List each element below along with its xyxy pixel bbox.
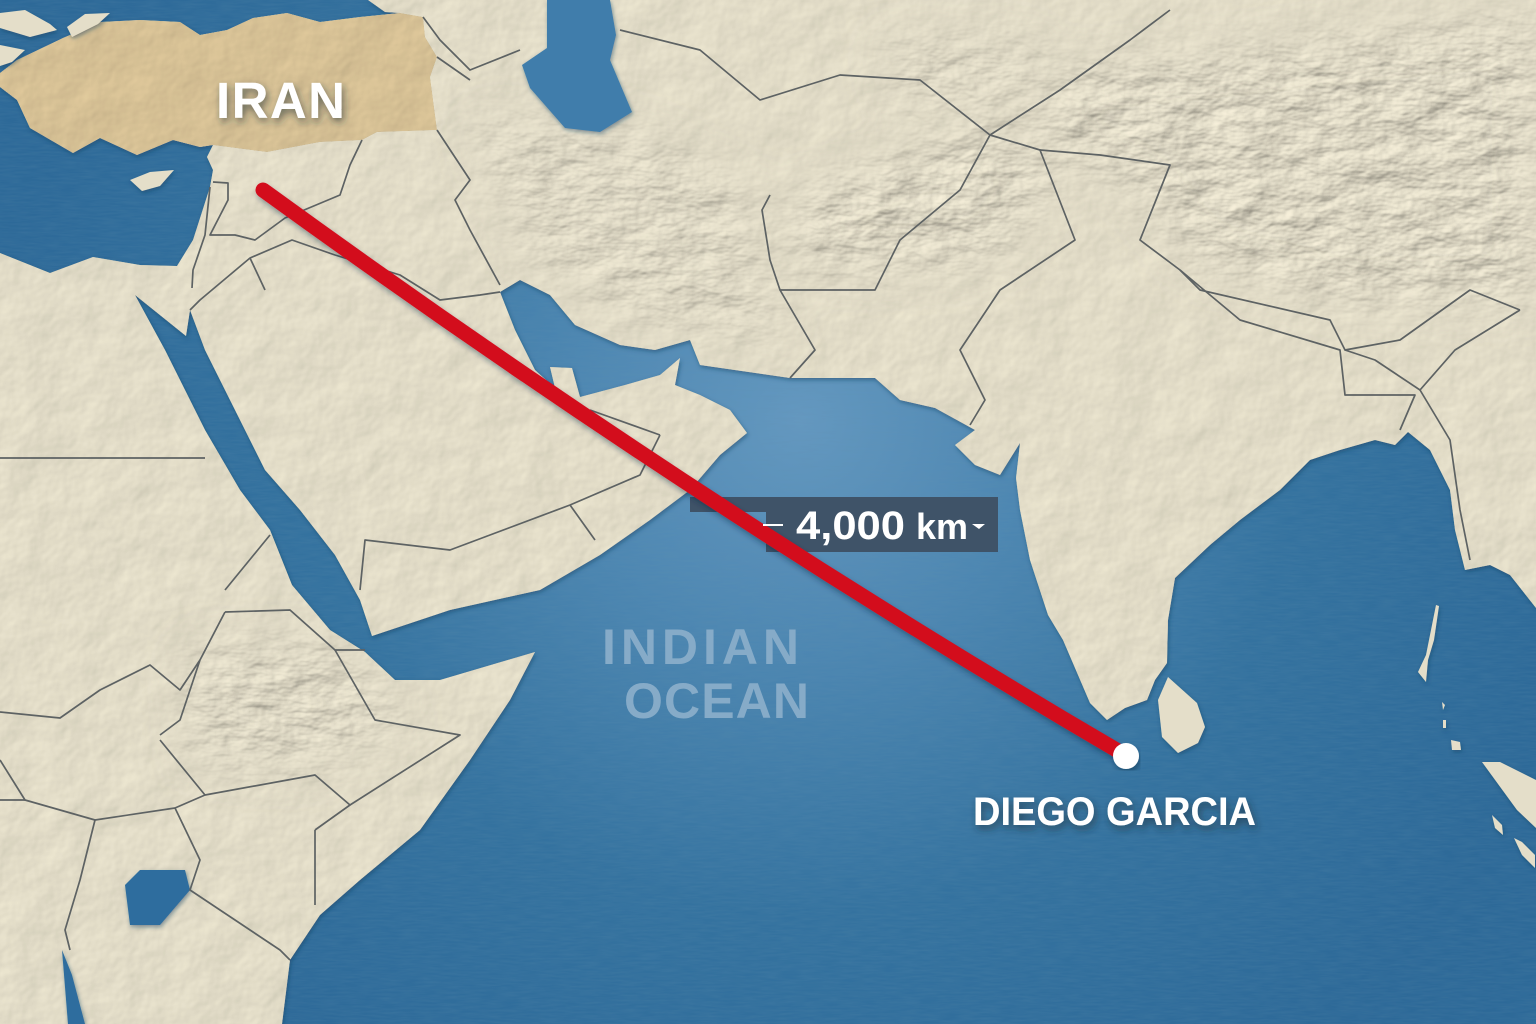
- Diego Garcia marker: [1113, 743, 1139, 769]
- Indian Ocean label: INDIAN: [602, 619, 799, 675]
- distance unit: km: [916, 506, 968, 547]
- right tick: [972, 524, 985, 529]
- Iran highlighted region: [0, 13, 437, 155]
- left tick of the distance label: [763, 524, 783, 526]
- Indian Ocean label: OCEAN: [624, 673, 809, 729]
- distance value: 4,000: [796, 504, 905, 548]
- route line from Iran to Diego Garcia: [263, 190, 1125, 755]
- label plate: [690, 497, 998, 552]
- Diego Garcia label: DIEGO GARCIA: [973, 790, 1256, 834]
- Indian Ocean label: [602, 619, 809, 729]
- mountain relief: Tibet, Iranian plateau, Ethiopian highlands: [174, 8, 1536, 784]
- distance label: [690, 497, 998, 552]
- inland seas and lakes: [62, 0, 632, 1024]
- Iran label: IRAN: [216, 72, 345, 129]
